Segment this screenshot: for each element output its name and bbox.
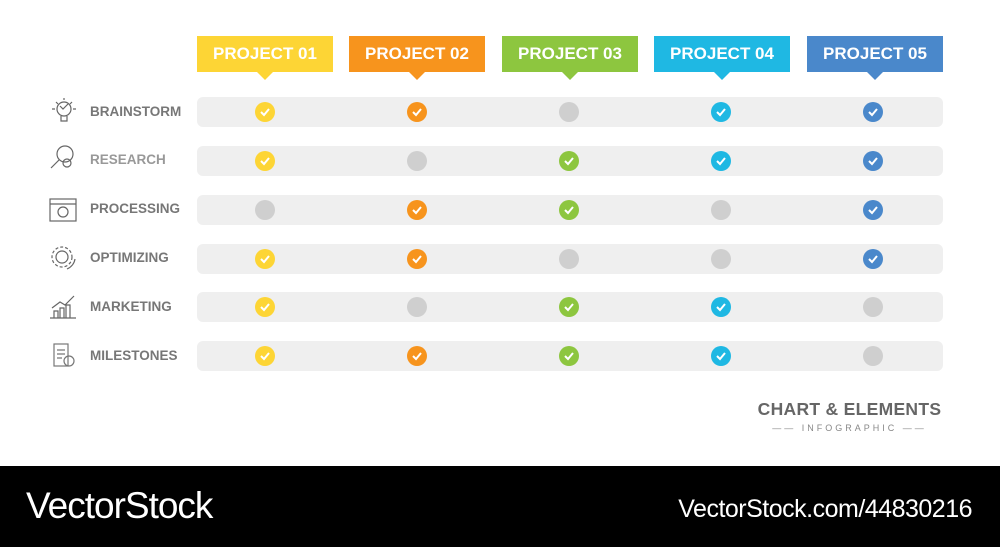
label: milestones: MILESTONES [90,348,178,363]
label: marketing: MARKETING [90,299,172,314]
header: project 05 [807,36,943,72]
icon: lightbulb [52,98,76,122]
label: processing: PROCESSING [90,201,180,216]
header: project 04 [654,36,790,72]
footer bar: VectorStock [26,485,212,526]
header: project 04: PROJECT 04 [670,44,774,63]
label: optimizing: OPTIMIZING [90,250,169,265]
label: brainstorm: BRAINSTORM [90,104,181,119]
row: marketing [197,292,943,322]
title block: chart & elements [758,399,941,433]
icon: checklist [53,343,75,367]
header: project 02: PROJECT 02 [365,44,469,63]
footer bar [0,466,1000,547]
header: project 03 [502,36,638,72]
icon: magnifier [50,145,74,168]
footer bar: VectorStock.com/44830216 [678,495,972,523]
header: project 01 [197,36,333,72]
label: research: RESEARCH [90,152,166,167]
icon: chart [50,296,76,319]
icon: browser [49,198,77,222]
row: processing [197,195,943,225]
icon: gear [51,246,76,270]
title block: chart & elements: CHART & ELEMENTS [758,399,941,419]
row: research [197,146,943,176]
header: project 05: PROJECT 05 [823,44,927,63]
row: brainstorm [197,97,943,127]
header: project 01: PROJECT 01 [213,44,317,63]
header: project 02 [349,36,485,72]
row: optimizing [197,244,943,274]
header: project 03: PROJECT 03 [518,44,622,63]
title block: chart & elements: —— INFOGRAPHIC —— [772,423,927,433]
row: milestones [197,341,943,371]
